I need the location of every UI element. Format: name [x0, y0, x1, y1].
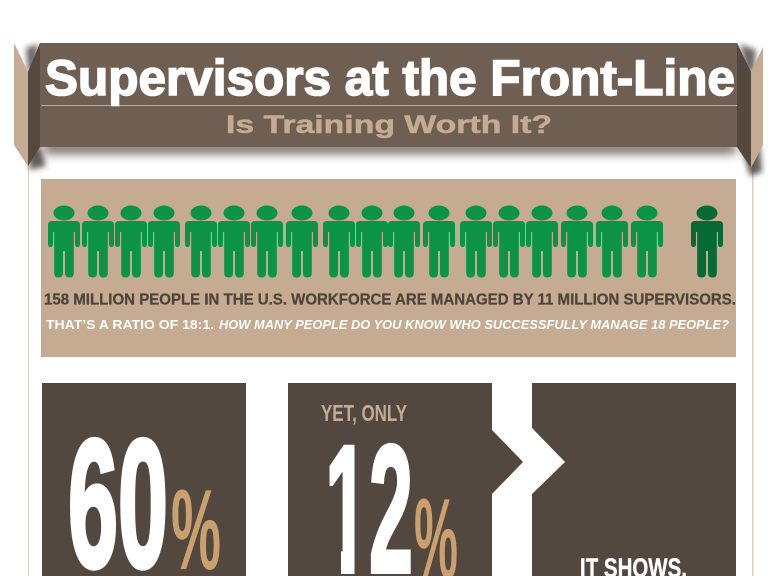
ratio statement: THAT’S A RATIO OF 18:1. — [46, 318, 214, 332]
subtitle: Is Training Worth It? — [226, 111, 552, 139]
ratio question: HOW MANY PEOPLE DO YOU KNOW WHO SUCCESSFULLY MANAGE 18 PEOPLE? — [219, 318, 729, 332]
icon row: 18 employees — [48, 206, 663, 278]
banner — [14, 43, 763, 176]
panel: it shows — [532, 383, 736, 576]
icon: supervisor — [691, 206, 723, 278]
label: yet, only: YET, ONLY — [321, 400, 407, 426]
workforce statement: 158 MILLION PEOPLE IN THE U.S. WORKFORCE ARE MANAGED BY 11 MILLION SUPERVISORS. — [44, 292, 736, 308]
panel: workforce ratio — [41, 179, 736, 357]
title: Supervisors at the Front-Line — [45, 50, 735, 106]
